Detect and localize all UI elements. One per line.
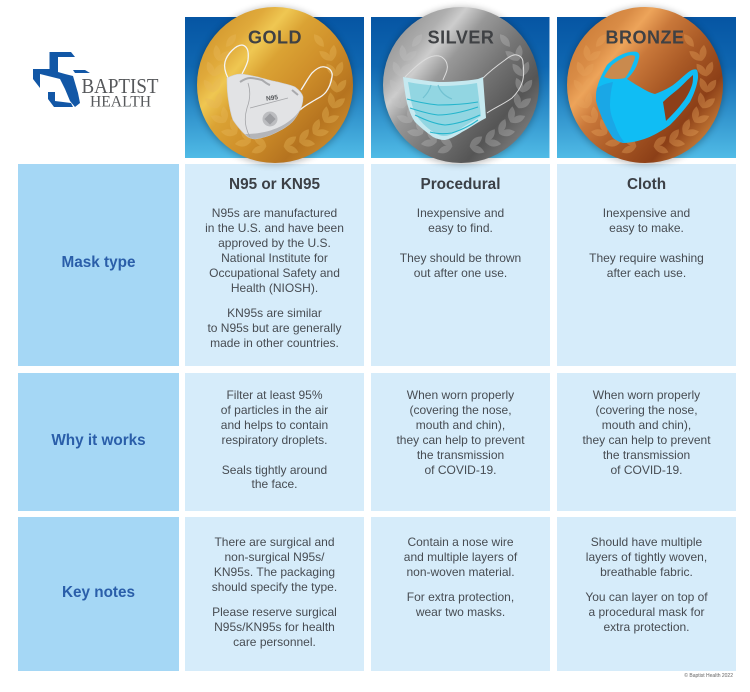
cell: bronze why it works bbox=[557, 373, 736, 511]
text: N95 description: Health (NIOSH). bbox=[231, 281, 318, 295]
laurel wreath bbox=[387, 32, 535, 156]
valve bbox=[262, 112, 278, 126]
text: bronze why: of COVID-19. bbox=[610, 463, 683, 477]
row label: Key notes bbox=[18, 517, 179, 671]
text: gold notes part 1: There are surgical and bbox=[214, 535, 335, 549]
text: procedural description: They should be thrown bbox=[400, 251, 521, 265]
medal shadow bbox=[382, 7, 540, 165]
text: silver notes part 2: wear two masks. bbox=[416, 605, 505, 619]
medal title: BRONZE bbox=[606, 28, 684, 48]
mask body bbox=[227, 74, 303, 139]
text: gold why: Seals tightly around bbox=[222, 463, 327, 477]
text: KN95 description: KN95s are similar bbox=[227, 306, 322, 320]
text: bronze why: (covering the nose, bbox=[595, 403, 698, 417]
medal: bronze bbox=[566, 7, 724, 165]
pleats bbox=[407, 99, 480, 134]
logo: Baptist Health bbox=[33, 52, 159, 110]
row label: Key notes: Key notes bbox=[62, 584, 135, 601]
mask inner tint bbox=[408, 82, 481, 136]
fold lines bbox=[245, 83, 288, 137]
cell: gold key notes bbox=[185, 517, 364, 671]
text: KN95 description bbox=[207, 306, 342, 350]
text: silver notes part 1: non-woven material. bbox=[406, 565, 515, 579]
text: procedural description: easy to find. bbox=[428, 221, 493, 235]
text: gold notes part 1: non-surgical N95s/ bbox=[224, 550, 325, 564]
text: N95 description: National Institute for bbox=[221, 251, 328, 265]
cell: gold why it works bbox=[185, 373, 364, 511]
medal: gold bbox=[196, 7, 354, 165]
left panel shading bbox=[596, 82, 625, 143]
mask label: N95 bbox=[266, 94, 279, 103]
text: gold notes part 2: care personnel. bbox=[233, 635, 316, 649]
copyright: © Baptist Health 2022 bbox=[684, 673, 733, 679]
text: silver notes part 2: For extra protection, bbox=[407, 590, 514, 604]
heading: N95 or KN95: N95 or KN95 bbox=[229, 176, 320, 193]
logo text: BAPTIST: BAPTIST bbox=[82, 74, 159, 98]
nose wire bbox=[240, 78, 270, 85]
panel: silver header background bbox=[371, 17, 550, 158]
text: gold why: and helps to contain bbox=[221, 418, 328, 432]
text: silver why: When worn properly bbox=[407, 388, 514, 402]
mask body bbox=[403, 77, 486, 140]
text: gold why: of particles in the air bbox=[221, 403, 328, 417]
text: bronze notes part 2: a procedural mask for bbox=[588, 605, 705, 619]
text: N95 description: approved by the U.S. bbox=[218, 236, 331, 250]
panel: gold header background bbox=[185, 17, 364, 158]
text: cloth description: easy to make. bbox=[609, 221, 684, 235]
text: gold why: Filter at least 95% bbox=[226, 388, 323, 402]
text: gold why: the face. bbox=[251, 477, 298, 491]
side wire bbox=[292, 90, 298, 95]
icon: N95 mask bbox=[225, 45, 332, 139]
nose fold bbox=[423, 85, 452, 99]
heading: Cloth: Cloth bbox=[627, 176, 666, 193]
text: cloth description: after each use. bbox=[607, 266, 686, 280]
text: procedural description bbox=[400, 206, 521, 280]
text: N95 description bbox=[205, 206, 344, 295]
text: silver why: (covering the nose, bbox=[409, 403, 512, 417]
panel: bronze header background bbox=[557, 17, 736, 158]
text: bronze notes part 2 bbox=[585, 590, 708, 634]
text: bronze notes part 2: extra protection. bbox=[603, 620, 690, 634]
header graphics bbox=[33, 4, 736, 168]
cell: bronze key notes bbox=[557, 517, 736, 671]
text: silver why: the transmission bbox=[417, 448, 504, 462]
text: bronze why: the transmission bbox=[603, 448, 690, 462]
text: silver why: of COVID-19. bbox=[424, 463, 497, 477]
medal disc bbox=[197, 7, 353, 163]
mask shading bbox=[245, 110, 300, 139]
mask outer shape bbox=[596, 52, 698, 143]
cell: silver why it works bbox=[371, 373, 550, 511]
text: silver notes part 2 bbox=[407, 590, 514, 619]
text: silver notes part 1: Contain a nose wire bbox=[407, 535, 514, 549]
heading: Procedural: Procedural bbox=[421, 176, 500, 193]
cell: silver key notes bbox=[371, 517, 550, 671]
text: cloth description: Inexpensive and bbox=[603, 206, 690, 220]
laurel wreath bbox=[571, 32, 719, 156]
text: gold notes part 2: Please reserve surgical bbox=[212, 605, 337, 619]
icon: procedural mask bbox=[403, 55, 524, 140]
text: bronze why: mouth and chin), bbox=[602, 418, 691, 432]
medal shadow bbox=[196, 7, 354, 165]
cell: gold mask type bbox=[185, 164, 364, 366]
medal shadow bbox=[566, 7, 724, 165]
row label: Mask type: Mask type bbox=[62, 254, 135, 271]
text: bronze notes part 1 bbox=[586, 535, 707, 579]
text: N95 description: Occupational Safety and bbox=[209, 266, 340, 280]
ear loops bbox=[225, 45, 332, 110]
medal disc bbox=[567, 7, 723, 163]
medal title: SILVER bbox=[428, 28, 494, 48]
text: gold notes part 2 bbox=[212, 605, 337, 649]
text: bronze notes part 1: breathable fabric. bbox=[600, 565, 693, 579]
icon: cross and Florida bbox=[33, 52, 90, 107]
logo text: HEALTH: HEALTH bbox=[90, 93, 151, 110]
left ear opening bbox=[604, 55, 635, 79]
medal disc bbox=[383, 7, 539, 163]
icon: cloth mask bbox=[596, 52, 698, 143]
text: gold notes part 2: N95s/KN95s for health bbox=[214, 620, 335, 634]
medal: silver bbox=[382, 7, 540, 165]
text: gold why: respiratory droplets. bbox=[221, 433, 328, 447]
text: silver notes part 1 bbox=[404, 535, 518, 579]
text: bronze notes part 1: Should have multiple bbox=[591, 535, 702, 549]
right ear opening bbox=[663, 75, 693, 121]
text: bronze why: When worn properly bbox=[593, 388, 700, 402]
row label: Mask type bbox=[18, 164, 179, 366]
text: N95 description: in the U.S. and have been bbox=[205, 221, 344, 235]
text: silver notes part 1: and multiple layers of bbox=[404, 550, 517, 564]
cell: silver mask type bbox=[371, 164, 550, 366]
row label: Why it works: Why it works bbox=[51, 432, 146, 449]
text: bronze why: they can help to prevent bbox=[582, 433, 711, 447]
laurel wreath bbox=[201, 32, 349, 156]
text: gold notes part 1 bbox=[212, 535, 337, 594]
ear loops bbox=[405, 55, 524, 113]
text: procedural description: out after one use. bbox=[414, 266, 507, 280]
valve centre bbox=[264, 113, 276, 125]
text: silver why: they can help to prevent bbox=[396, 433, 525, 447]
text: bronze notes part 1: layers of tightly woven, bbox=[586, 550, 707, 564]
text: bronze why bbox=[582, 388, 711, 477]
text: KN95 description: to N95s but are generally bbox=[207, 321, 342, 335]
medal title: GOLD bbox=[248, 28, 302, 48]
text: silver why: mouth and chin), bbox=[416, 418, 505, 432]
text: procedural description: Inexpensive and bbox=[417, 206, 504, 220]
text: gold why bbox=[221, 388, 328, 491]
text: bronze notes part 2: You can layer on top of bbox=[585, 590, 708, 604]
text: N95 description: N95s are manufactured bbox=[212, 206, 337, 220]
text: gold notes part 1: should specify the type. bbox=[212, 580, 337, 594]
text: gold notes part 1: KN95s. The packaging bbox=[214, 565, 335, 579]
row label: Why it works bbox=[18, 373, 179, 511]
text: cloth description: They require washing bbox=[589, 251, 704, 265]
text: silver why bbox=[396, 388, 525, 477]
text: KN95 description: made in other countries. bbox=[210, 336, 339, 350]
cell: bronze mask type bbox=[557, 164, 736, 366]
text: cloth description bbox=[589, 206, 704, 280]
